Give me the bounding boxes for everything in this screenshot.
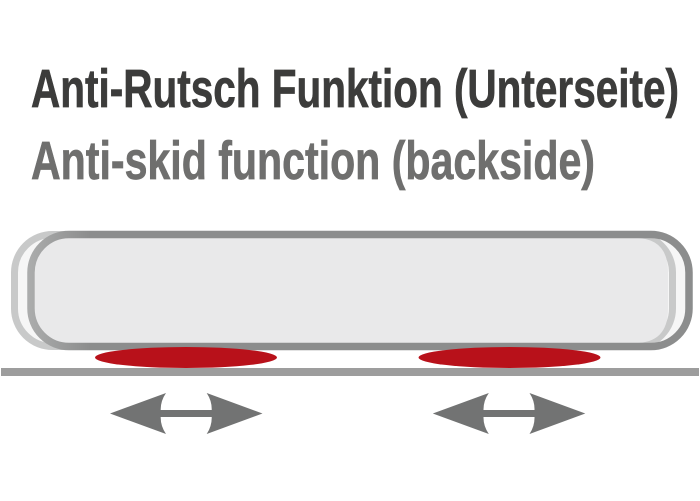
board: inner face [35,238,668,343]
ground line [1,368,699,376]
board: base fill [31,234,689,346]
arrow: right double-headed [433,393,585,434]
illustration: sliding board cross-section [1,234,699,434]
anti-slip pad: right [418,347,600,368]
board: main outline [31,234,689,346]
anti-slip pad: left [95,347,277,368]
board: shifted ghost outline [14,234,672,346]
arrow: left double-headed [110,393,262,434]
